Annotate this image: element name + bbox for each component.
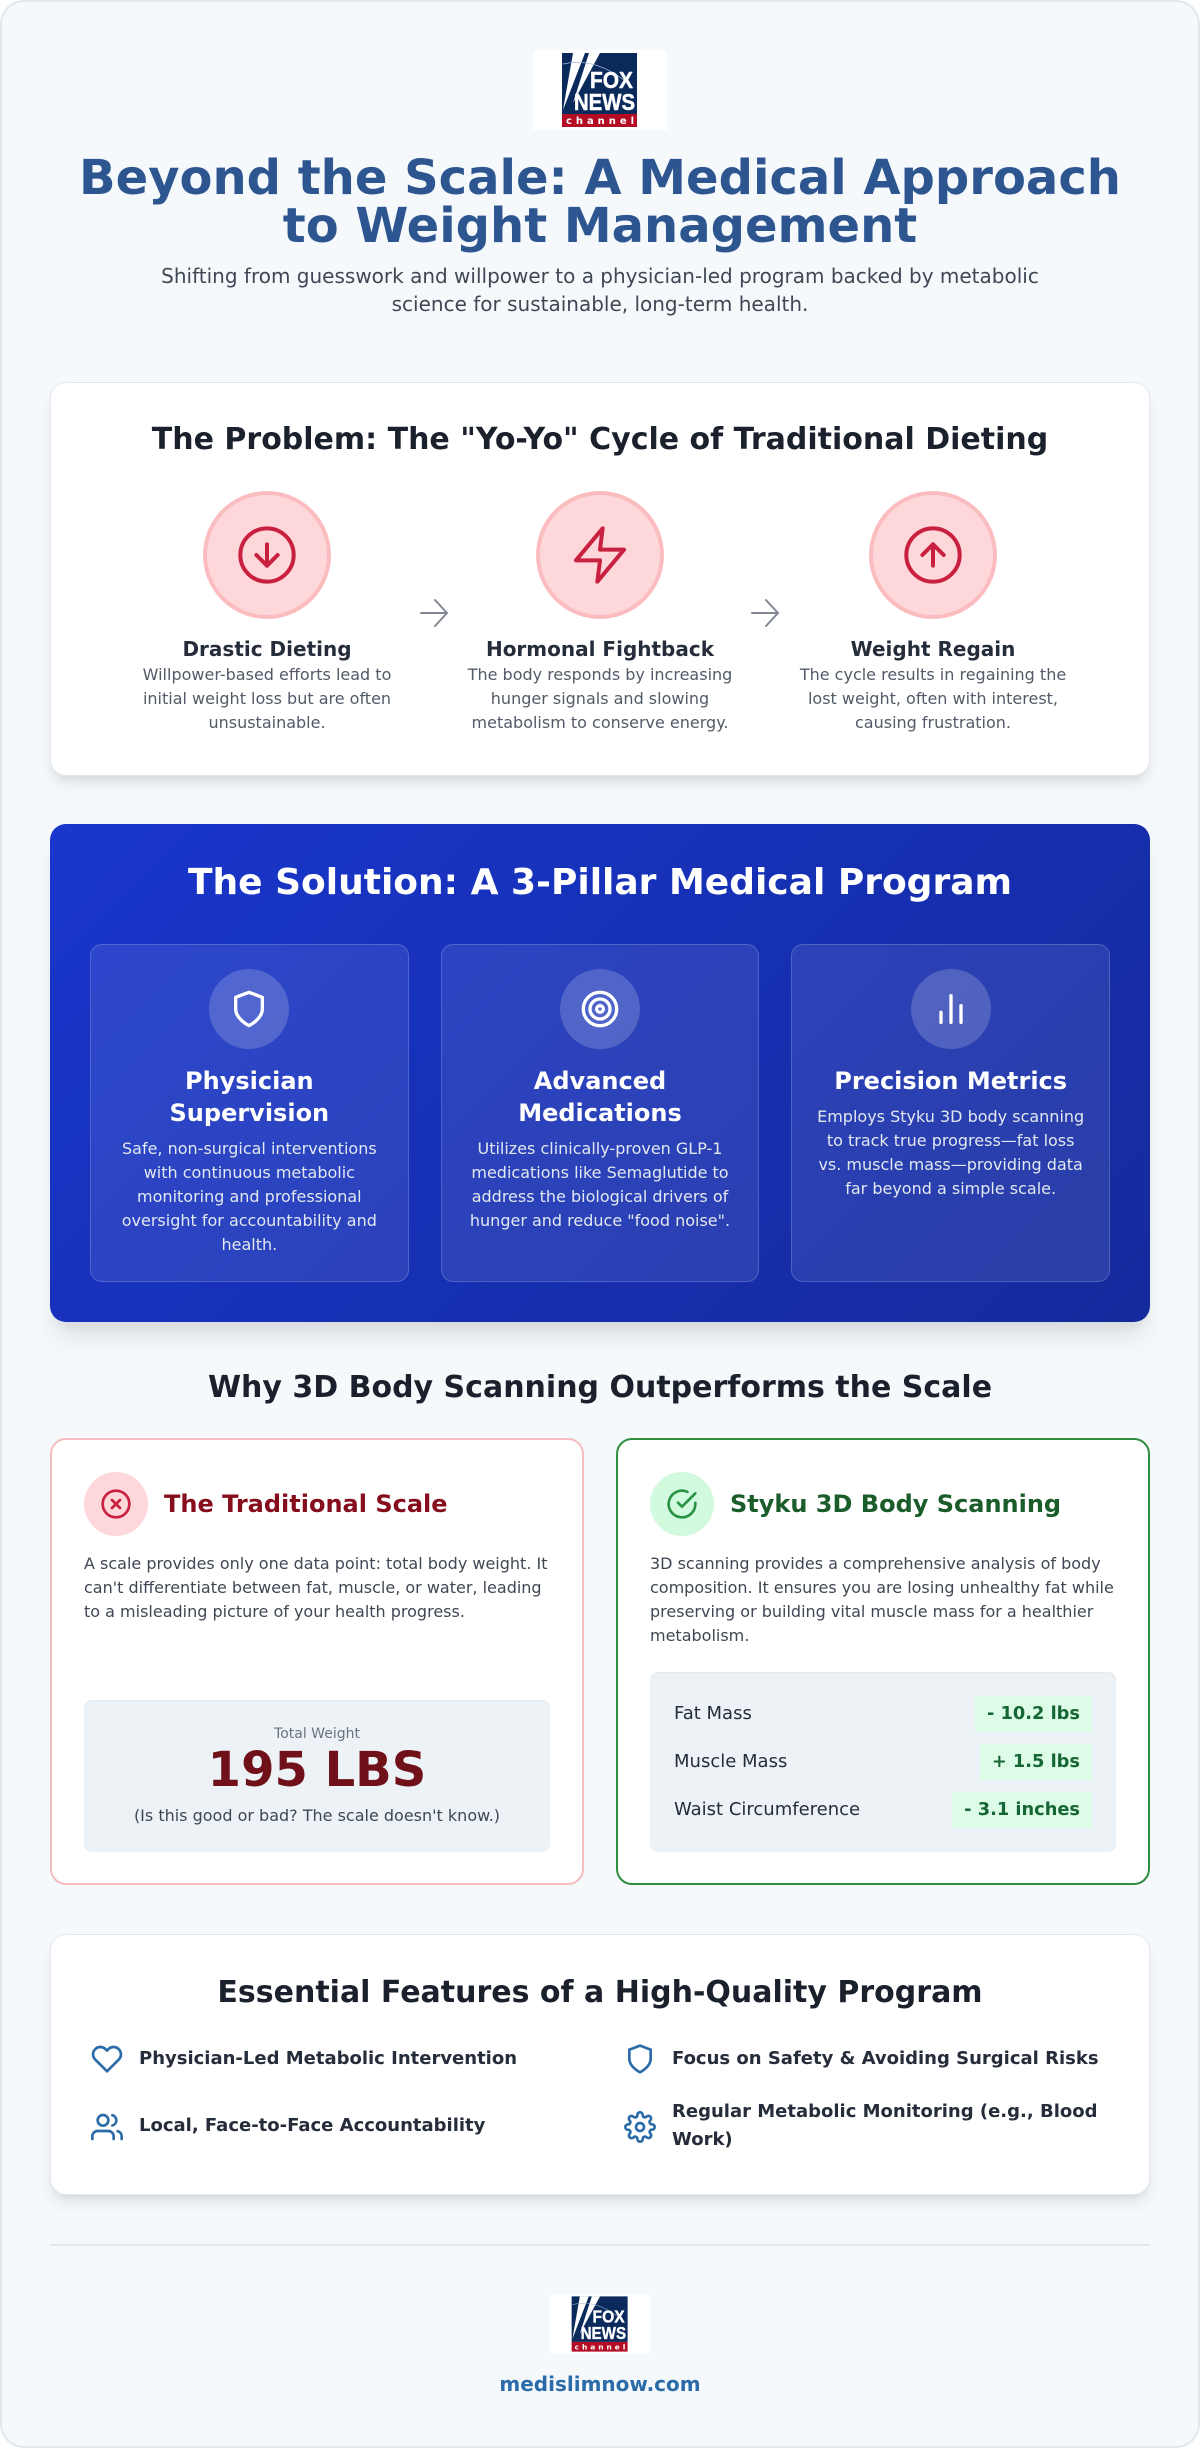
step text	[800, 665, 1066, 732]
pillar text: oversight for accountability and	[122, 1211, 377, 1230]
step text: initial weight loss but are often	[143, 689, 391, 708]
feature text	[672, 2101, 1097, 2150]
row: muscle mass: + 1.5 lbs	[992, 1751, 1080, 1772]
readout label: Total Weight	[274, 1726, 360, 1742]
panel: the problem	[50, 382, 1150, 776]
title: Beyond the Scale: A Medical Approach	[79, 150, 1121, 206]
panel text	[84, 1554, 548, 1620]
title: to Weight Management	[283, 198, 917, 254]
row: waist circumference	[674, 1792, 1092, 1828]
panel heading: The Traditional Scale	[164, 1490, 448, 1518]
step 3: weight regain	[800, 491, 1066, 732]
pillar title: Precision Metrics	[834, 1067, 1067, 1095]
step text: hunger signals and slowing	[491, 689, 709, 708]
icon: arrow down circle	[203, 491, 331, 619]
pillar text: far beyond a simple scale.	[845, 1179, 1056, 1198]
feature text: Local, Face-to-Face Accountability	[139, 2115, 485, 2136]
icon: gear	[624, 2111, 656, 2143]
row: muscle mass: Muscle Mass	[674, 1751, 787, 1772]
row: muscle mass	[674, 1744, 1092, 1780]
step text: The body responds by increasing	[468, 665, 732, 684]
row: fat mass	[674, 1696, 1092, 1732]
pillar text	[122, 1139, 377, 1254]
step title: Weight Regain	[851, 637, 1015, 661]
pillar text: address the biological drivers of	[472, 1187, 728, 1206]
step text: causing frustration.	[855, 713, 1011, 732]
pillar text: Employs Styku 3D body scanning	[817, 1107, 1084, 1126]
icon: shield	[628, 2044, 652, 2074]
subtitle: Shifting from guesswork and willpower to a physician-led program backed by metabolic	[161, 264, 1039, 288]
panel text: metabolism.	[650, 1626, 749, 1644]
pillar: advanced medications	[441, 944, 759, 1282]
pillar text: monitoring and professional	[137, 1187, 362, 1206]
panel: styku 3D body scanning	[616, 1438, 1150, 1885]
icon: arrow up circle	[869, 491, 997, 619]
header logo: Fox News Channel	[533, 50, 667, 130]
step text	[468, 665, 732, 732]
footer logo: Fox News Channel: NEWS	[581, 2323, 626, 2343]
pillar text: vs. muscle mass—providing data	[818, 1155, 1083, 1174]
icon: lightning bolt	[536, 491, 664, 619]
icon: shield	[209, 969, 289, 1049]
footer logo: Fox News Channel	[550, 2294, 650, 2354]
panel text: composition. It ensures you are losing unhealthy fat while	[650, 1578, 1114, 1596]
step title: Drastic Dieting	[182, 637, 352, 661]
panel text: 3D scanning provides a comprehensive analysis of body	[650, 1554, 1101, 1572]
header logo: Fox News Channel: FOX	[590, 67, 634, 93]
feature text: Focus on Safety & Avoiding Surgical Risks	[672, 2048, 1099, 2069]
pillar title: Physician	[185, 1067, 314, 1095]
row: waist circumference: - 3.1 inches	[964, 1799, 1080, 1820]
icon: bar chart	[911, 969, 991, 1049]
step text: lost weight, often with interest,	[808, 689, 1058, 708]
header logo: Fox News Channel: NEWS	[574, 89, 635, 115]
panel text	[650, 1554, 1114, 1644]
step text: The cycle results in regaining the	[800, 665, 1066, 684]
icon: heart	[92, 2046, 122, 2073]
pillar title	[170, 1067, 329, 1127]
pillar text: with continuous metabolic	[144, 1163, 355, 1182]
icon: check circle	[650, 1472, 714, 1536]
total weight readout	[84, 1700, 550, 1852]
pillar text: Utilizes clinically-proven GLP-1	[477, 1139, 722, 1158]
panel: essential features	[50, 1934, 1150, 2195]
panel text: can't differentiate between fat, muscle, or water, leading	[84, 1578, 542, 1596]
panel heading: Styku 3D Body Scanning	[730, 1490, 1061, 1518]
subtitle	[161, 264, 1039, 316]
subtitle: science for sustainable, long-term health.	[392, 292, 808, 316]
row: fat mass: Fat Mass	[674, 1703, 752, 1724]
pillar title: Advanced	[534, 1067, 666, 1095]
icon: target	[560, 969, 640, 1049]
footer logo: Fox News Channel: FOX	[593, 2307, 625, 2327]
icon: x circle	[84, 1472, 148, 1536]
heading: the problem: The Problem: The "Yo-Yo" Cycle of Traditional Dieting	[152, 422, 1048, 456]
icon: users	[91, 2114, 123, 2140]
heading: why 3D scanning: Why 3D Body Scanning Outperforms the Scale	[208, 1370, 992, 1404]
feature text: Work)	[672, 2129, 733, 2150]
readout value: 195 LBS	[208, 1742, 426, 1798]
arrow: step 1 to step 2	[420, 599, 448, 627]
step 1: drastic dieting	[143, 491, 391, 732]
panel text: to a misleading picture of your health progress.	[84, 1602, 465, 1620]
pillar text: hunger and reduce "food noise".	[470, 1211, 730, 1230]
pillar text	[470, 1139, 730, 1230]
pillar title	[518, 1067, 682, 1127]
feature text: Physician-Led Metabolic Intervention	[139, 2048, 517, 2069]
feature: metabolic monitoring	[624, 2101, 1097, 2150]
pillar text	[817, 1107, 1084, 1198]
feature: safety focus	[628, 2044, 1099, 2074]
heading: the solution: The Solution: A 3-Pillar Medical Program	[188, 862, 1012, 902]
row: waist circumference: Waist Circumference	[674, 1799, 860, 1820]
panel: the traditional scale	[50, 1438, 584, 1885]
panel text: A scale provides only one data point: total body weight. It	[84, 1554, 547, 1572]
pillar: physician supervision	[90, 944, 409, 1282]
step text: Willpower-based efforts lead to	[143, 665, 391, 684]
pillar title: Supervision	[170, 1099, 329, 1127]
readout caption: (Is this good or bad? The scale doesn't know.)	[134, 1806, 500, 1825]
title	[79, 150, 1121, 254]
footer logo: Fox News Channel: channel	[575, 2342, 625, 2351]
pillar: precision metrics	[791, 944, 1110, 1282]
arrow: step 2 to step 3	[751, 599, 779, 627]
pillar text: to track true progress—fat loss	[827, 1131, 1074, 1150]
feature: physician-led intervention	[92, 2046, 517, 2073]
panel: the solution	[50, 824, 1150, 1322]
step title: Hormonal Fightback	[486, 637, 714, 661]
pillar text: Safe, non-surgical interventions	[122, 1139, 377, 1158]
step text: unsustainable.	[208, 713, 326, 732]
row: fat mass: - 10.2 lbs	[987, 1703, 1080, 1724]
feature text: Regular Metabolic Monitoring (e.g., Blood	[672, 2101, 1097, 2122]
heading: essential features: Essential Features of a High-Quality Program	[217, 1974, 983, 2010]
pillar text: medications like Semaglutide to	[471, 1163, 729, 1182]
step 2: hormonal fightback	[468, 491, 732, 732]
pillar title: Medications	[518, 1099, 682, 1127]
step text	[143, 665, 391, 732]
panel text: preserving or building vital muscle mass for a healthier	[650, 1602, 1093, 1620]
pillar text: health.	[221, 1235, 277, 1254]
step text: metabolism to conserve energy.	[472, 713, 728, 732]
body composition results	[650, 1672, 1116, 1852]
footer website: medislimnow.com	[499, 2372, 701, 2396]
feature: local accountability	[91, 2114, 485, 2140]
header logo: Fox News Channel: channel	[566, 116, 634, 127]
